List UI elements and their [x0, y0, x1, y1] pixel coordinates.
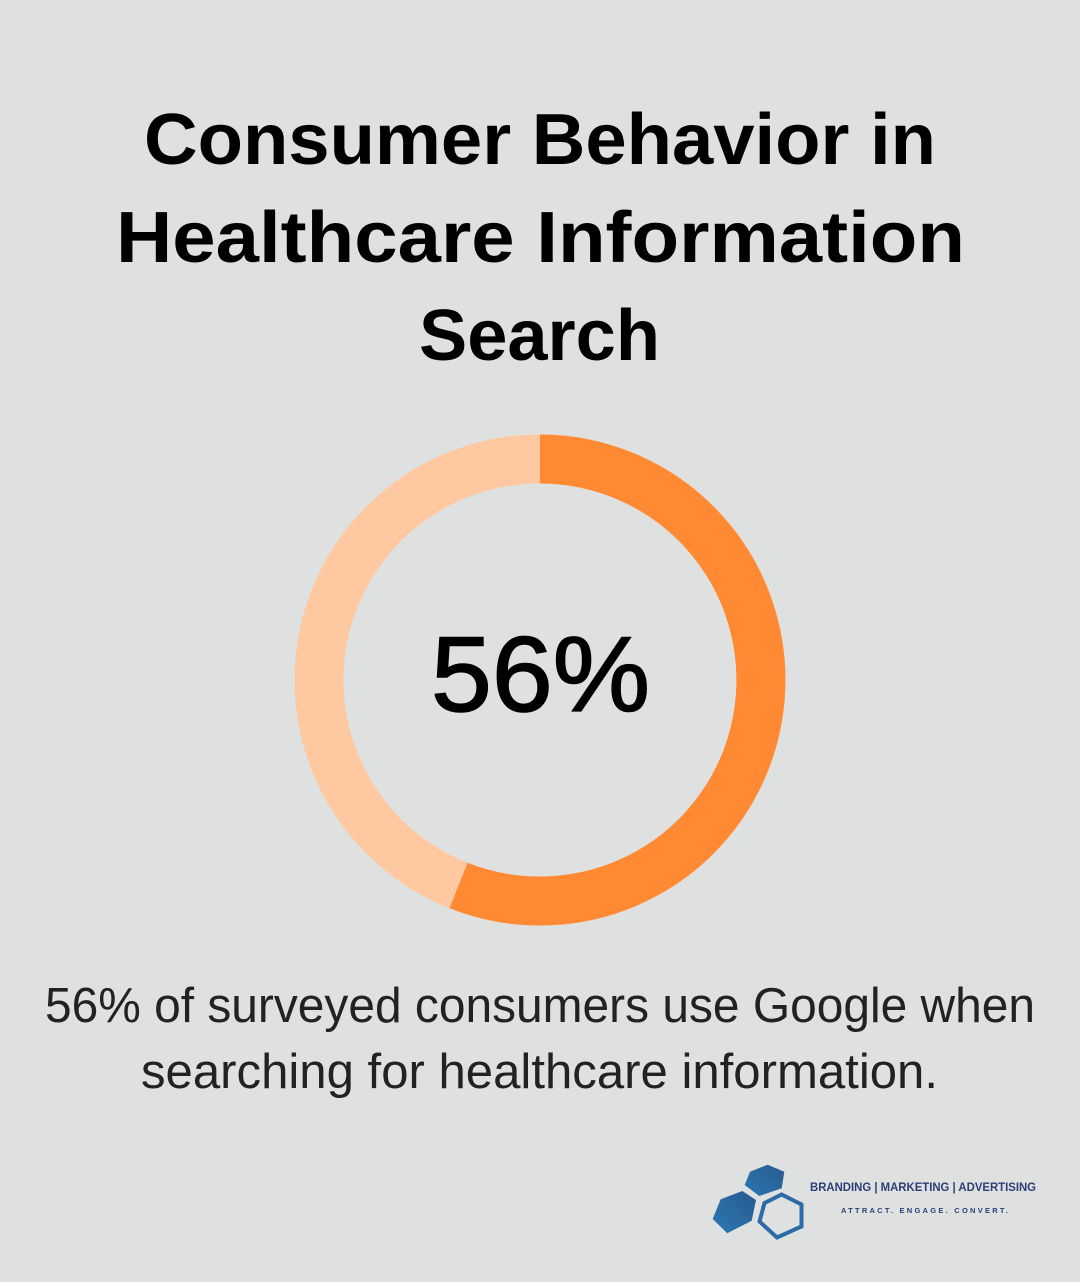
donut chart: 56% [319, 459, 761, 901]
logo text: ATTRACT. ENGAGE. CONVERT. [841, 1206, 1008, 1215]
logo icon: hexagons [713, 1165, 802, 1238]
title: Consumer Behavior in [144, 100, 936, 180]
donut value: 56% [431, 614, 650, 734]
logo [713, 1165, 1036, 1238]
description text: 56% of surveyed consumers use Google when [45, 979, 1035, 1033]
donut track: remaining 44% [319, 459, 761, 901]
logo text: BRANDING | MARKETING | ADVERTISING [810, 1182, 1036, 1194]
description text: searching for healthcare information. [141, 1045, 938, 1099]
title: Search [419, 296, 660, 376]
description text [45, 979, 1035, 1099]
title: Healthcare Information [116, 198, 965, 278]
title [116, 100, 965, 376]
logo text [810, 1182, 1036, 1215]
donut segment: 56% [459, 459, 761, 901]
